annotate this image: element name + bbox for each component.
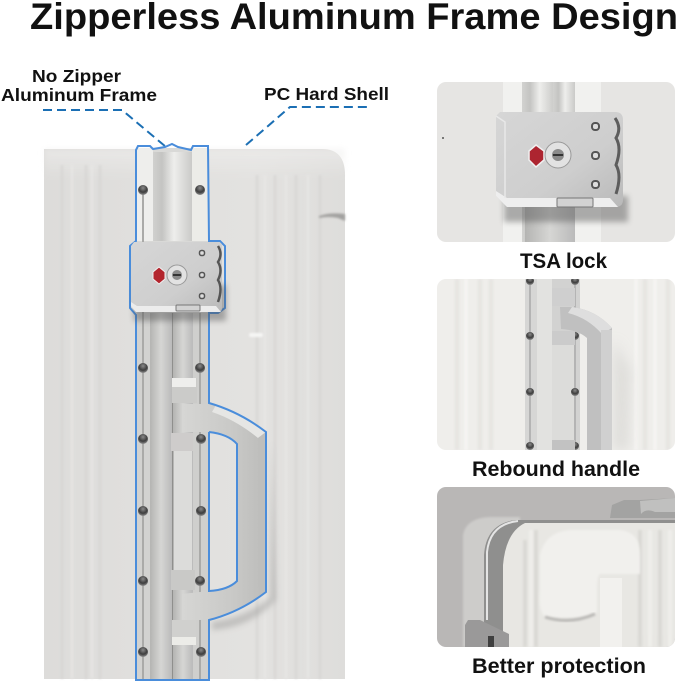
handle shadow — [212, 440, 276, 630]
label: pc hard shell: PC Hard Shell — [264, 84, 389, 104]
dashed leader line — [246, 107, 369, 145]
label: aluminum frame: Aluminum Frame — [1, 85, 157, 105]
dashed leader line — [43, 110, 166, 147]
suitcase shell — [44, 149, 345, 679]
caption: better protection: Better protection — [472, 655, 646, 678]
corner bump — [540, 530, 640, 618]
main suitcase — [44, 144, 345, 680]
lock body — [496, 112, 623, 207]
TSA red diamond — [529, 145, 544, 167]
TSA red diamond — [153, 267, 165, 284]
handle mounting blocks — [171, 378, 197, 645]
label: no zipper: No Zipper — [32, 66, 121, 86]
rebound handle — [182, 404, 266, 620]
frame outline — [130, 144, 266, 680]
panel: rebound handle — [437, 277, 675, 481]
handle — [560, 307, 612, 450]
caption: TSA lock: TSA lock — [520, 250, 607, 273]
keyhole — [545, 142, 571, 168]
panel photo: handle side view — [437, 277, 675, 450]
top handle — [610, 498, 675, 518]
panel photo: corner protector — [437, 487, 675, 647]
aluminum frame edge — [484, 520, 675, 631]
panel: better protection — [437, 487, 675, 678]
callout: no zipper aluminum frame — [1, 66, 166, 147]
aluminum frame — [136, 148, 209, 680]
panel: TSA lock — [437, 82, 675, 273]
frame rivets — [138, 185, 206, 657]
corner protector notch — [319, 213, 345, 221]
keyhole — [167, 265, 187, 285]
lock corner — [465, 620, 509, 647]
TSA combination lock — [131, 242, 226, 321]
callout: pc hard shell — [246, 84, 389, 145]
panel photo: lock close-up — [437, 82, 675, 242]
caption: rebound handle: Rebound handle — [472, 458, 640, 481]
white shell — [503, 523, 675, 647]
